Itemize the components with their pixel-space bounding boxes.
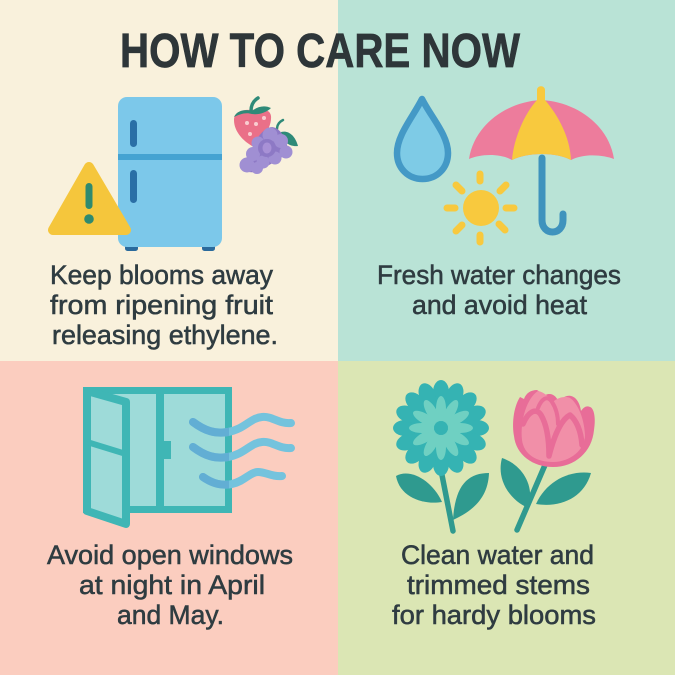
caption: clean water: Clean water and [401,540,594,570]
panel: water and heat [338,0,675,361]
icon: warning triangle [53,167,126,230]
title: HOW TO CARE NOW [120,25,521,78]
caption: clean water: trimmed stems [407,570,590,600]
icon: wind [193,417,291,485]
icon: window [86,390,228,524]
caption: fresh water [377,260,621,320]
icon: teal flower [393,380,489,531]
caption: clean water [392,540,596,630]
icon: umbrella [469,86,614,232]
caption: avoid open windows: at night in April [79,570,265,600]
panel: clean water [338,361,675,675]
panel: keep away from fruit [0,0,338,361]
caption: fresh water: and avoid heat [412,290,587,320]
icon: strawberry and grapes [234,98,298,174]
caption: keep blooms away [50,260,278,350]
caption: avoid open windows: Avoid open windows [47,540,293,570]
icon: pink tulip [501,390,595,530]
caption: keep blooms away: Keep blooms away [50,260,273,290]
icon: refrigerator [118,97,222,251]
panel: open windows [0,361,338,675]
caption: avoid open windows: and May. [117,600,224,630]
caption: avoid open windows [47,540,293,630]
icon: sun [447,174,514,242]
caption: keep blooms away: releasing ethylene. [52,320,278,350]
icon: water drop [397,99,448,179]
caption: clean water: for hardy blooms [392,600,596,630]
caption: fresh water: Fresh water changes [377,260,621,290]
caption: keep blooms away: from ripening fruit [50,290,274,320]
